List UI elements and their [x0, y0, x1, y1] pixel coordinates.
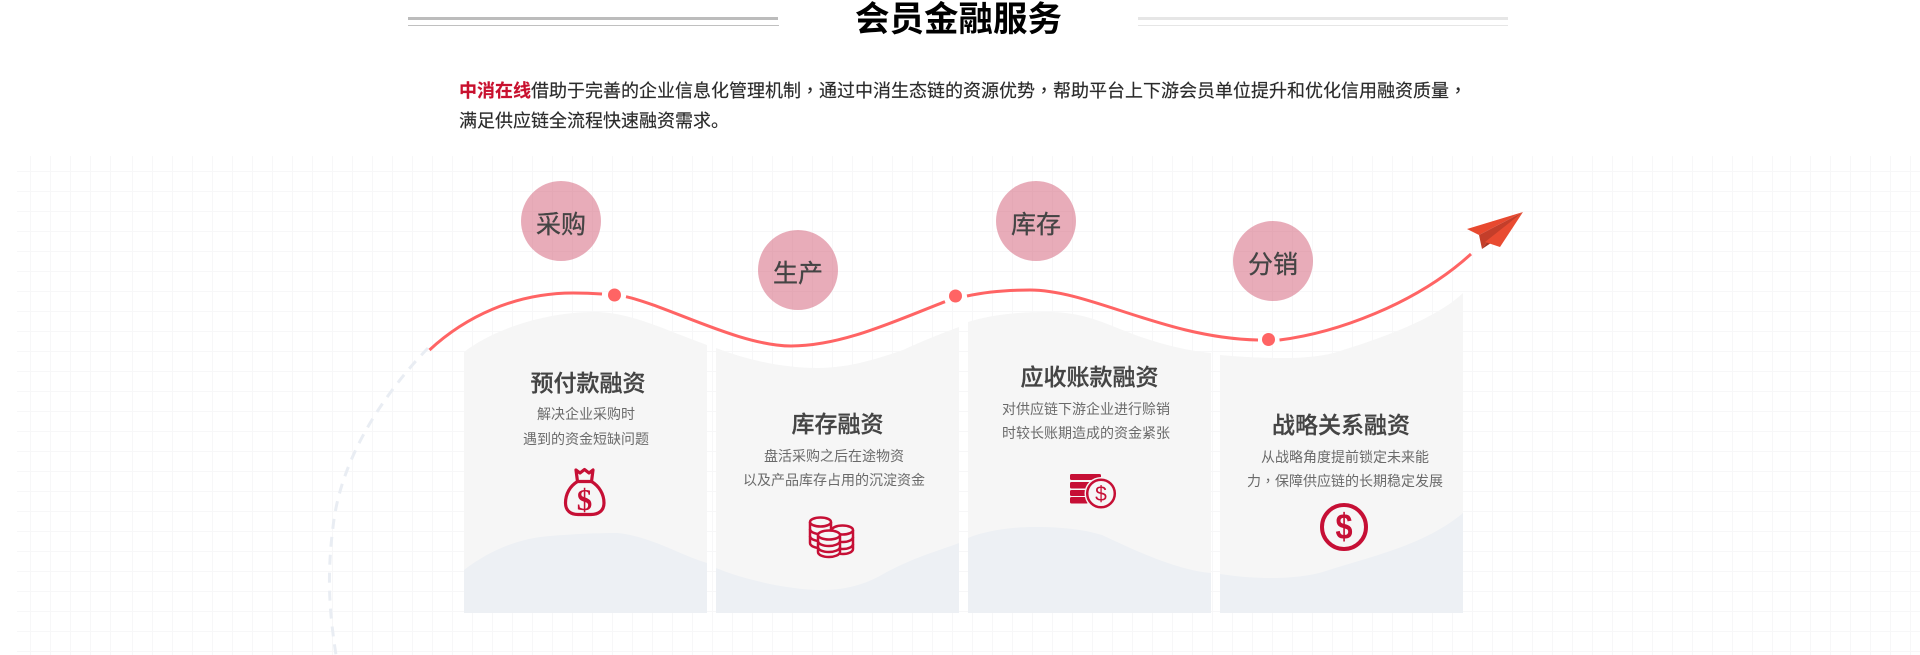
stage: inventory [996, 181, 1076, 261]
stage: production [758, 230, 838, 310]
stage: purchasing [521, 181, 601, 261]
icon: money stack with coin: $ [1095, 483, 1107, 506]
intro text block [459, 81, 1467, 131]
icon: money bag: $ [577, 482, 592, 517]
stage: distribution: 分销 [1248, 251, 1298, 279]
icon: money stack with coin [1070, 474, 1118, 510]
intro text block: 中消在线借助于完善的企业信息化管理机制，通过中消生态链的资源优势，帮助平台上下游会员单位提升和优化信用融资质量， [459, 81, 1467, 101]
title [408, 1, 1508, 39]
panel: inventory financing [716, 327, 959, 613]
description: inventory: 以及产品库存占用的沉淀资金 [743, 472, 925, 488]
stage: inventory: 库存 [1011, 211, 1061, 239]
dashed lead-in curve [329, 348, 428, 655]
description: strategic: 力，保障供应链的长期稳定发展 [1247, 473, 1443, 489]
description: strategic [1247, 449, 1443, 489]
heading: prepayment: 预付款融资 [530, 370, 646, 396]
icon: dollar circle [1322, 505, 1366, 549]
icon: paper plane arrow [1467, 212, 1523, 249]
growth curve [430, 254, 1471, 350]
heading: receivables: 应收账款融资 [1020, 364, 1158, 390]
panel: prepayment financing [464, 312, 707, 613]
panel: strategic financing [1220, 293, 1463, 613]
stage: distribution [1233, 221, 1313, 301]
heading: inventory: 库存融资 [792, 411, 884, 437]
panel: receivables financing [968, 312, 1211, 613]
description: receivables: 时较长账期造成的资金紧张 [1002, 425, 1170, 441]
description: inventory: 盘活采购之后在途物资 [764, 448, 904, 464]
heading: strategic: 战略关系融资 [1272, 412, 1410, 438]
curve node markers [608, 288, 1275, 346]
icon: money bag [566, 470, 604, 517]
description: prepayment [523, 406, 649, 447]
description: prepayment: 解决企业采购时 [537, 406, 635, 422]
icon: dollar circle: $ [1335, 508, 1353, 548]
description: prepayment: 遇到的资金短缺问题 [523, 431, 649, 447]
stage: production: 生产 [773, 260, 823, 288]
description: receivables [1002, 401, 1170, 441]
description: inventory [743, 448, 925, 488]
intro text block: 满足供应链全流程快速融资需求。 [459, 111, 729, 131]
stage: purchasing: 采购 [536, 211, 586, 239]
description: receivables: 对供应链下游企业进行赊销 [1002, 401, 1170, 417]
icon: coin stacks [810, 518, 853, 557]
title: 会员金融服务 [855, 1, 1062, 39]
description: strategic: 从战略角度提前锁定未来能 [1261, 449, 1429, 465]
